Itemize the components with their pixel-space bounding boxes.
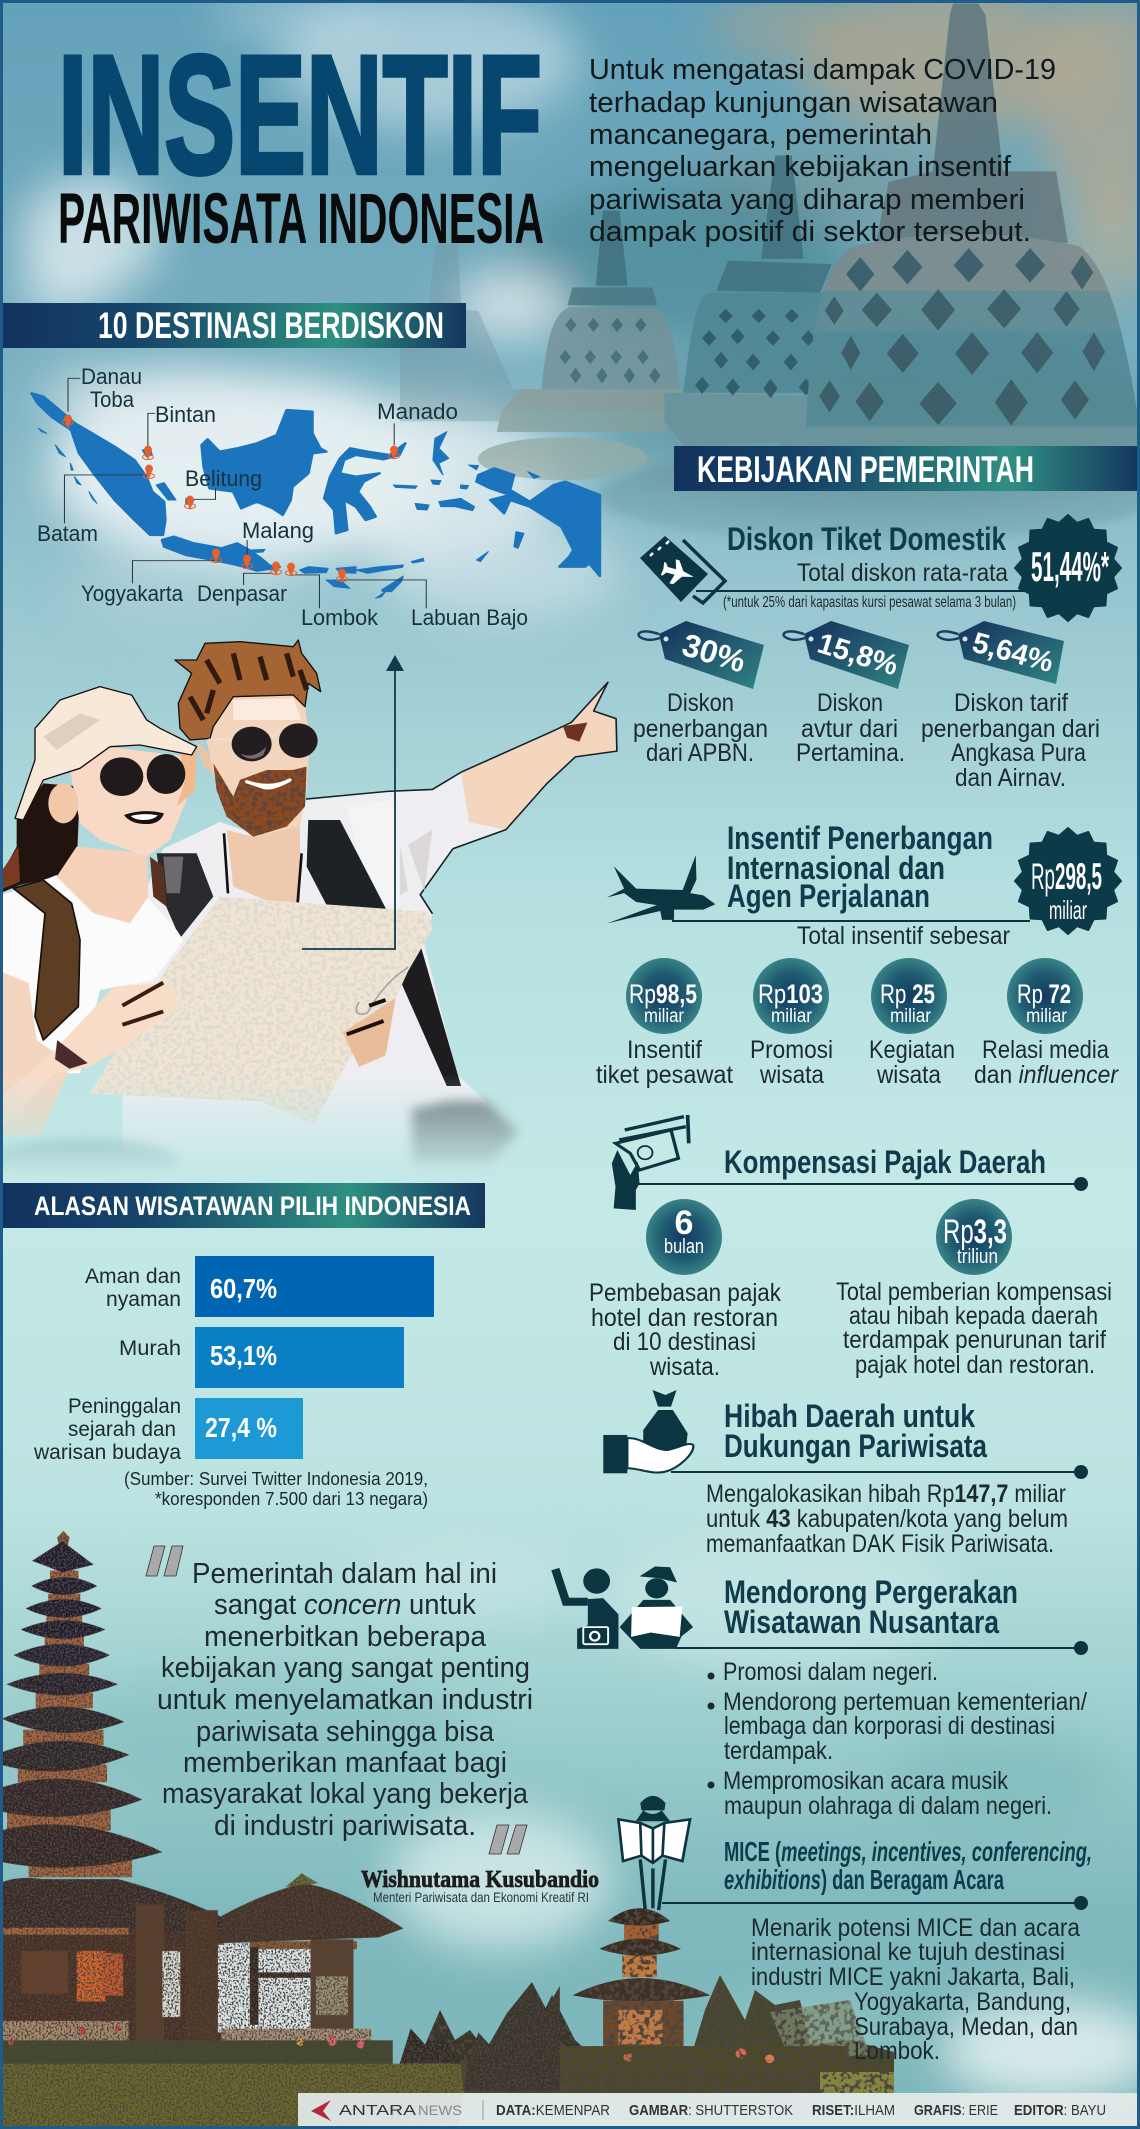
tag: 30%: 30%: [678, 626, 750, 680]
description: Pertamina: [796, 689, 905, 767]
stat: tiket pesawat: [596, 958, 733, 1089]
icon: man reading map on pagoda: [618, 1796, 690, 1910]
big stupa: [778, 4, 1140, 450]
icon: flight tickets: [640, 536, 725, 603]
stat: Rp 3,3 triliun: [936, 1199, 1012, 1275]
gate pillars: [136, 1904, 164, 2064]
quote text: masyarakat lokal yang bekerja: [162, 1778, 529, 1810]
credits: EDITOR: BAYU: [1014, 2102, 1106, 2119]
paper map and hands: [0, 897, 432, 1186]
text: untuk 43 kabupaten/kota yang belum: [706, 1505, 1068, 1533]
icon: airplane: [607, 855, 715, 923]
intro paragraph: mengeluarkan kebijakan insentif: [589, 151, 1012, 183]
stat: Rp 3,3 triliun: triliun: [957, 1246, 998, 1268]
location pins: [62, 414, 400, 583]
description: Pertamina: avtur dari: [801, 715, 898, 743]
bar: aman dan nyaman: Aman dan: [85, 1265, 181, 1288]
heading: alasan wisatawan: [0, 1183, 485, 1228]
heading: Insentif Penerbangan: [727, 820, 993, 856]
title main word: INSENTIF: [58, 20, 542, 209]
stupa three: [478, 211, 683, 480]
text: tax exemption: hotel dan restoran: [591, 1304, 778, 1332]
stat: promosi wisata: Rp103: [758, 979, 823, 1009]
heading: 10 destinasi berdiskon: 10 DESTINASI BERDISKON: [98, 305, 444, 346]
icon: hand holding money: [612, 1115, 689, 1210]
stat: tiket pesawat: miliar: [644, 1006, 685, 1027]
credits: DATA:KEMENPAR: [496, 2102, 610, 2119]
stat: relasi media: Relasi media: [982, 1036, 1109, 1064]
background trees: [400, 1995, 600, 2063]
section: MICE: [662, 1836, 1092, 2065]
destination labels: Malang: [242, 518, 314, 543]
description: Angkasa Pura: dan Airnav.: [955, 764, 1066, 792]
icon: two travellers: [555, 1567, 693, 1649]
description: APBN: [633, 689, 768, 767]
leader lines: [64, 378, 426, 608]
destination labels: Yogyakarta: [81, 581, 184, 606]
credits: GAMBAR: SHUTTERSTOK: [629, 2102, 793, 2119]
stat: 6 bulan: 6: [675, 1204, 693, 1242]
text: Menarik potensi MICE dan acara: [751, 1914, 1080, 1942]
stat: 6 bulan: bulan: [664, 1236, 704, 1258]
destination labels: Lombok: [301, 605, 379, 630]
heading: Agen Perjalanan: [727, 878, 930, 914]
quote text: di industri pariwisata.: [214, 1810, 476, 1842]
destination labels: Danau: [81, 364, 142, 389]
stat: tiket pesawat: Insentif: [627, 1036, 702, 1064]
destination labels: [37, 364, 528, 630]
text: [751, 1914, 1080, 2065]
quote text: untuk menyelamatkan industri: [157, 1684, 533, 1716]
stat: kegiatan wisata: Rp 25: [880, 979, 935, 1009]
small islands: [38, 428, 540, 598]
destination labels: Bintan: [155, 402, 216, 427]
bar: warisan budaya: 27,4 %: [205, 1412, 277, 1443]
quote text: kebijakan yang sangat penting: [161, 1652, 530, 1684]
quote text: sangat concern untuk: [214, 1589, 476, 1621]
description: Angkasa Pura: penerbangan dari: [921, 715, 1100, 743]
credits: RISET:ILHAM: [812, 2102, 895, 2119]
bullet list: lembaga dan korporasi di destinasi: [724, 1712, 1055, 1740]
text: tax exemption: [589, 1279, 781, 1381]
destination labels: Labuan Bajo: [411, 605, 528, 630]
heading: Kompensasi Pajak Daerah: [724, 1144, 1046, 1180]
section: wisatawan nusantara: [555, 1567, 1088, 1820]
woman head and body: [0, 687, 197, 1073]
bullet list: maupun olahraga di dalam negeri.: [724, 1792, 1052, 1820]
stat: relasi media: dan influencer: [974, 1061, 1120, 1089]
pagoda tier bands: [7, 1570, 132, 1877]
pavilion opening: [218, 1943, 314, 2033]
description: Pertamina: Pertamina.: [796, 739, 905, 767]
text: [706, 1480, 1068, 1558]
intro paragraph: mancanegara, pemerintah: [589, 119, 932, 151]
logo: Antara News: ANTARA: [339, 2102, 416, 2119]
intro paragraph: pariwisata yang diharap memberi: [589, 184, 1025, 216]
credits: GRAFIS: ERIE: [914, 2102, 998, 2119]
distant shrine silhouettes: [400, 2029, 461, 2064]
credits: [496, 2102, 1106, 2119]
Kalimantan: [202, 410, 326, 515]
bar: murah: [119, 1327, 404, 1388]
quote text: menerbitkan beberapa: [204, 1621, 487, 1653]
section: hibah daerah: [603, 1390, 1088, 1558]
stat: promosi wisata: wisata: [759, 1061, 824, 1089]
title: [58, 20, 544, 259]
quote: [146, 1546, 599, 1905]
quote text: pariwisata sehingga bisa: [196, 1716, 495, 1748]
text: tax exemption: Pembebasan pajak: [589, 1279, 781, 1307]
Sulawesi: [324, 443, 405, 533]
bar: aman dan nyaman: [85, 1256, 434, 1317]
stat: relasi media: Rp 72: [1017, 979, 1071, 1009]
text: Lombok.: [854, 2037, 940, 2065]
heading: [727, 820, 993, 914]
source note: *koresponden 7.500 dari 13 negara): [155, 1489, 428, 1509]
bullet list: terdampak.: [724, 1737, 833, 1765]
stat: promosi wisata: miliar: [771, 1006, 813, 1027]
text: Surabaya, Medan, dan: [854, 2013, 1078, 2041]
attribution: Menteri Pariwisata dan Ekonomi Kreatif RI: [373, 1889, 589, 1905]
stat: kegiatan wisata: miliar: [890, 1006, 932, 1027]
hedge: [0, 2064, 464, 2129]
description: APBN: Diskon: [667, 689, 734, 717]
description: APBN: penerbangan: [633, 715, 768, 743]
badge: average discount: [1015, 515, 1121, 621]
tag: 5,64%: 5,64%: [969, 627, 1057, 679]
heading: 10 destinasi berdiskon: [0, 303, 466, 348]
bar chart: reasons for choosing Indonesia: [33, 1256, 434, 1509]
man torso and pointing arm: [122, 682, 617, 1197]
attribution: [361, 1867, 599, 1905]
bar: aman dan nyaman: 60,7%: [210, 1273, 277, 1304]
text: tax exemption: di 10 destinasi: [613, 1328, 756, 1356]
destination labels: Toba: [90, 387, 135, 412]
badge: total incentive: miliar: [1049, 895, 1087, 925]
footnote: (*untuk 25% dari kapasitas kursi pesawat selama 3 bulan): [723, 594, 1016, 611]
quote text: [157, 1558, 533, 1842]
stat: relasi media: [974, 958, 1120, 1089]
stat: tiket pesawat: tiket pesawat: [596, 1061, 733, 1089]
stat: promosi wisata: Promosi: [750, 1036, 833, 1064]
Papua: [476, 468, 600, 576]
title subtitle: PARIWISATA INDONESIA: [58, 180, 544, 259]
intro paragraph: Untuk mengatasi dampak COVID-19: [589, 54, 1056, 86]
stupas of Borobudur: [400, 4, 1140, 543]
subheading: Total diskon rata-rata: [797, 559, 1008, 587]
stat: Rp 3,3 triliun: Rp3,3: [943, 1213, 1007, 1251]
text: compensation total: atau hibah kepada daerah: [849, 1302, 1098, 1330]
description: Angkasa Pura: Angkasa Pura: [951, 739, 1086, 767]
section: insentif penerbangan internasional: [596, 820, 1121, 1089]
small pagoda: [540, 1908, 846, 2072]
ground: [450, 2060, 894, 2093]
text: memanfaatkan DAK Fisik Pariwisata.: [706, 1530, 1054, 1558]
bar: warisan budaya: sejarah dan: [68, 1418, 176, 1441]
bullet list: Mendorong pertemuan kementerian/: [723, 1688, 1087, 1716]
logo: Antara News: [311, 2100, 462, 2121]
description: APBN: dari APBN.: [646, 739, 754, 767]
intro paragraph: terhadap kunjungan wisatawan: [589, 87, 998, 119]
bar: warisan budaya: warisan budaya: [33, 1441, 181, 1464]
heading: Internasional dan: [727, 850, 945, 886]
description: Pertamina: Diskon: [817, 689, 883, 717]
text: compensation total: terdampak penurunan tarif: [843, 1326, 1106, 1354]
section: kompensasi pajak daerah: [589, 1115, 1112, 1381]
bullet list: Mempromosikan acara musik: [723, 1767, 1008, 1795]
temple foreground: Balinese meru and pavilion: [0, 1531, 560, 2129]
section: diskon tiket domestik: [633, 515, 1121, 792]
pagoda roofs: [0, 1531, 162, 1868]
intro paragraph: [589, 54, 1056, 248]
destination labels: Denpasar: [197, 581, 287, 606]
attribution: Wishnutama Kusubandio: [361, 1867, 599, 1893]
stupa two: [598, 155, 1140, 543]
intro paragraph: dampak positif di sektor tersebut.: [589, 216, 1031, 248]
text: internasional ke tujuh destinasi: [751, 1938, 1065, 1966]
bar: murah: Murah: [119, 1337, 181, 1360]
pavilion roof: [218, 1883, 403, 1943]
heading: Mendorong Pergerakan: [724, 1574, 1018, 1610]
icon: hand holding money bag: [603, 1390, 693, 1473]
arrow from map to destinations: [302, 655, 404, 949]
destination labels: Batam: [37, 521, 98, 546]
stat: kegiatan wisata: wisata: [876, 1061, 941, 1089]
photo illustration: tourists with map: [0, 640, 617, 1197]
text: Yogyakarta, Bandung,: [854, 1988, 1071, 2016]
tag: 15,8%: [784, 621, 909, 689]
quote text: memberikan manfaat bagi: [183, 1747, 507, 1779]
far stupa: [400, 243, 520, 422]
source note: [124, 1469, 428, 1509]
text: Mengalokasikan hibah Rp147,7 miliar: [706, 1480, 1066, 1508]
heading: Hibah Daerah untuk: [724, 1398, 975, 1434]
heading: alasan wisatawan: ALASAN WISATAWAN PILIH INDONESIA: [34, 1191, 471, 1221]
tag: 15,8%: 15,8%: [814, 628, 902, 682]
bullet list: [708, 1658, 1087, 1820]
heading: [724, 1398, 987, 1464]
Java: [162, 537, 273, 571]
tag: 30%: [639, 621, 764, 689]
closing quote mark: [489, 1825, 527, 1854]
text: industri MICE yakni Jakarta, Bali,: [751, 1963, 1075, 1991]
subheading: Total insentif sebesar: [797, 922, 1010, 950]
heading: [724, 1574, 1018, 1640]
temple foreground: trees and small pagoda: [400, 1908, 894, 2093]
heading: Diskon Tiket Domestik: [727, 521, 1006, 557]
opening quote mark: [146, 1546, 183, 1576]
bullet list: Promosi dalam negeri.: [723, 1658, 938, 1686]
text: compensation total: pajak hotel dan restoran.: [855, 1351, 1095, 1379]
bar: warisan budaya: [33, 1395, 303, 1464]
badge: total incentive: [1015, 828, 1121, 934]
footer credits bar: [298, 2093, 1140, 2126]
heading: Wisatawan Nusantara: [724, 1604, 999, 1640]
bar: warisan budaya: Peninggalan: [68, 1395, 181, 1418]
destination labels: Manado: [377, 399, 458, 424]
man head and straps: [157, 640, 400, 938]
Sumatra: [32, 393, 165, 535]
hall body: [0, 1932, 225, 2064]
description: Angkasa Pura: [921, 689, 1100, 792]
stat: promosi wisata: [750, 958, 833, 1089]
bar: aman dan nyaman: nyaman: [106, 1288, 181, 1311]
quote text: Pemerintah dalam hal ini: [192, 1558, 497, 1590]
stat: kegiatan wisata: Kegiatan: [869, 1036, 955, 1064]
stat: tiket pesawat: Rp98,5: [629, 979, 697, 1009]
stat: kegiatan wisata: [869, 958, 955, 1089]
tag: 5,64%: [938, 621, 1064, 684]
stat: relasi media: miliar: [1026, 1006, 1068, 1027]
text: compensation total: [836, 1278, 1112, 1379]
heading: Dukungan Pariwisata: [724, 1428, 987, 1464]
logo: Antara News: NEWS: [418, 2102, 462, 2118]
heading: exhibitions) dan Beragam Acara: [724, 1864, 1004, 1895]
heading: [724, 1836, 1092, 1895]
main hall roof: [0, 1878, 221, 1935]
source note: (Sumber: Survei Twitter Indonesia 2019,: [124, 1469, 428, 1489]
stat: 6 bulan: [646, 1199, 722, 1275]
text: tax exemption: wisata.: [649, 1353, 720, 1381]
stone terrace and flowers: [0, 2021, 129, 2044]
map of Indonesia: [32, 364, 600, 630]
description: Angkasa Pura: Diskon tarif: [954, 689, 1068, 717]
destination labels: Belitung: [185, 466, 262, 491]
bar: murah: 53,1%: [210, 1340, 277, 1371]
